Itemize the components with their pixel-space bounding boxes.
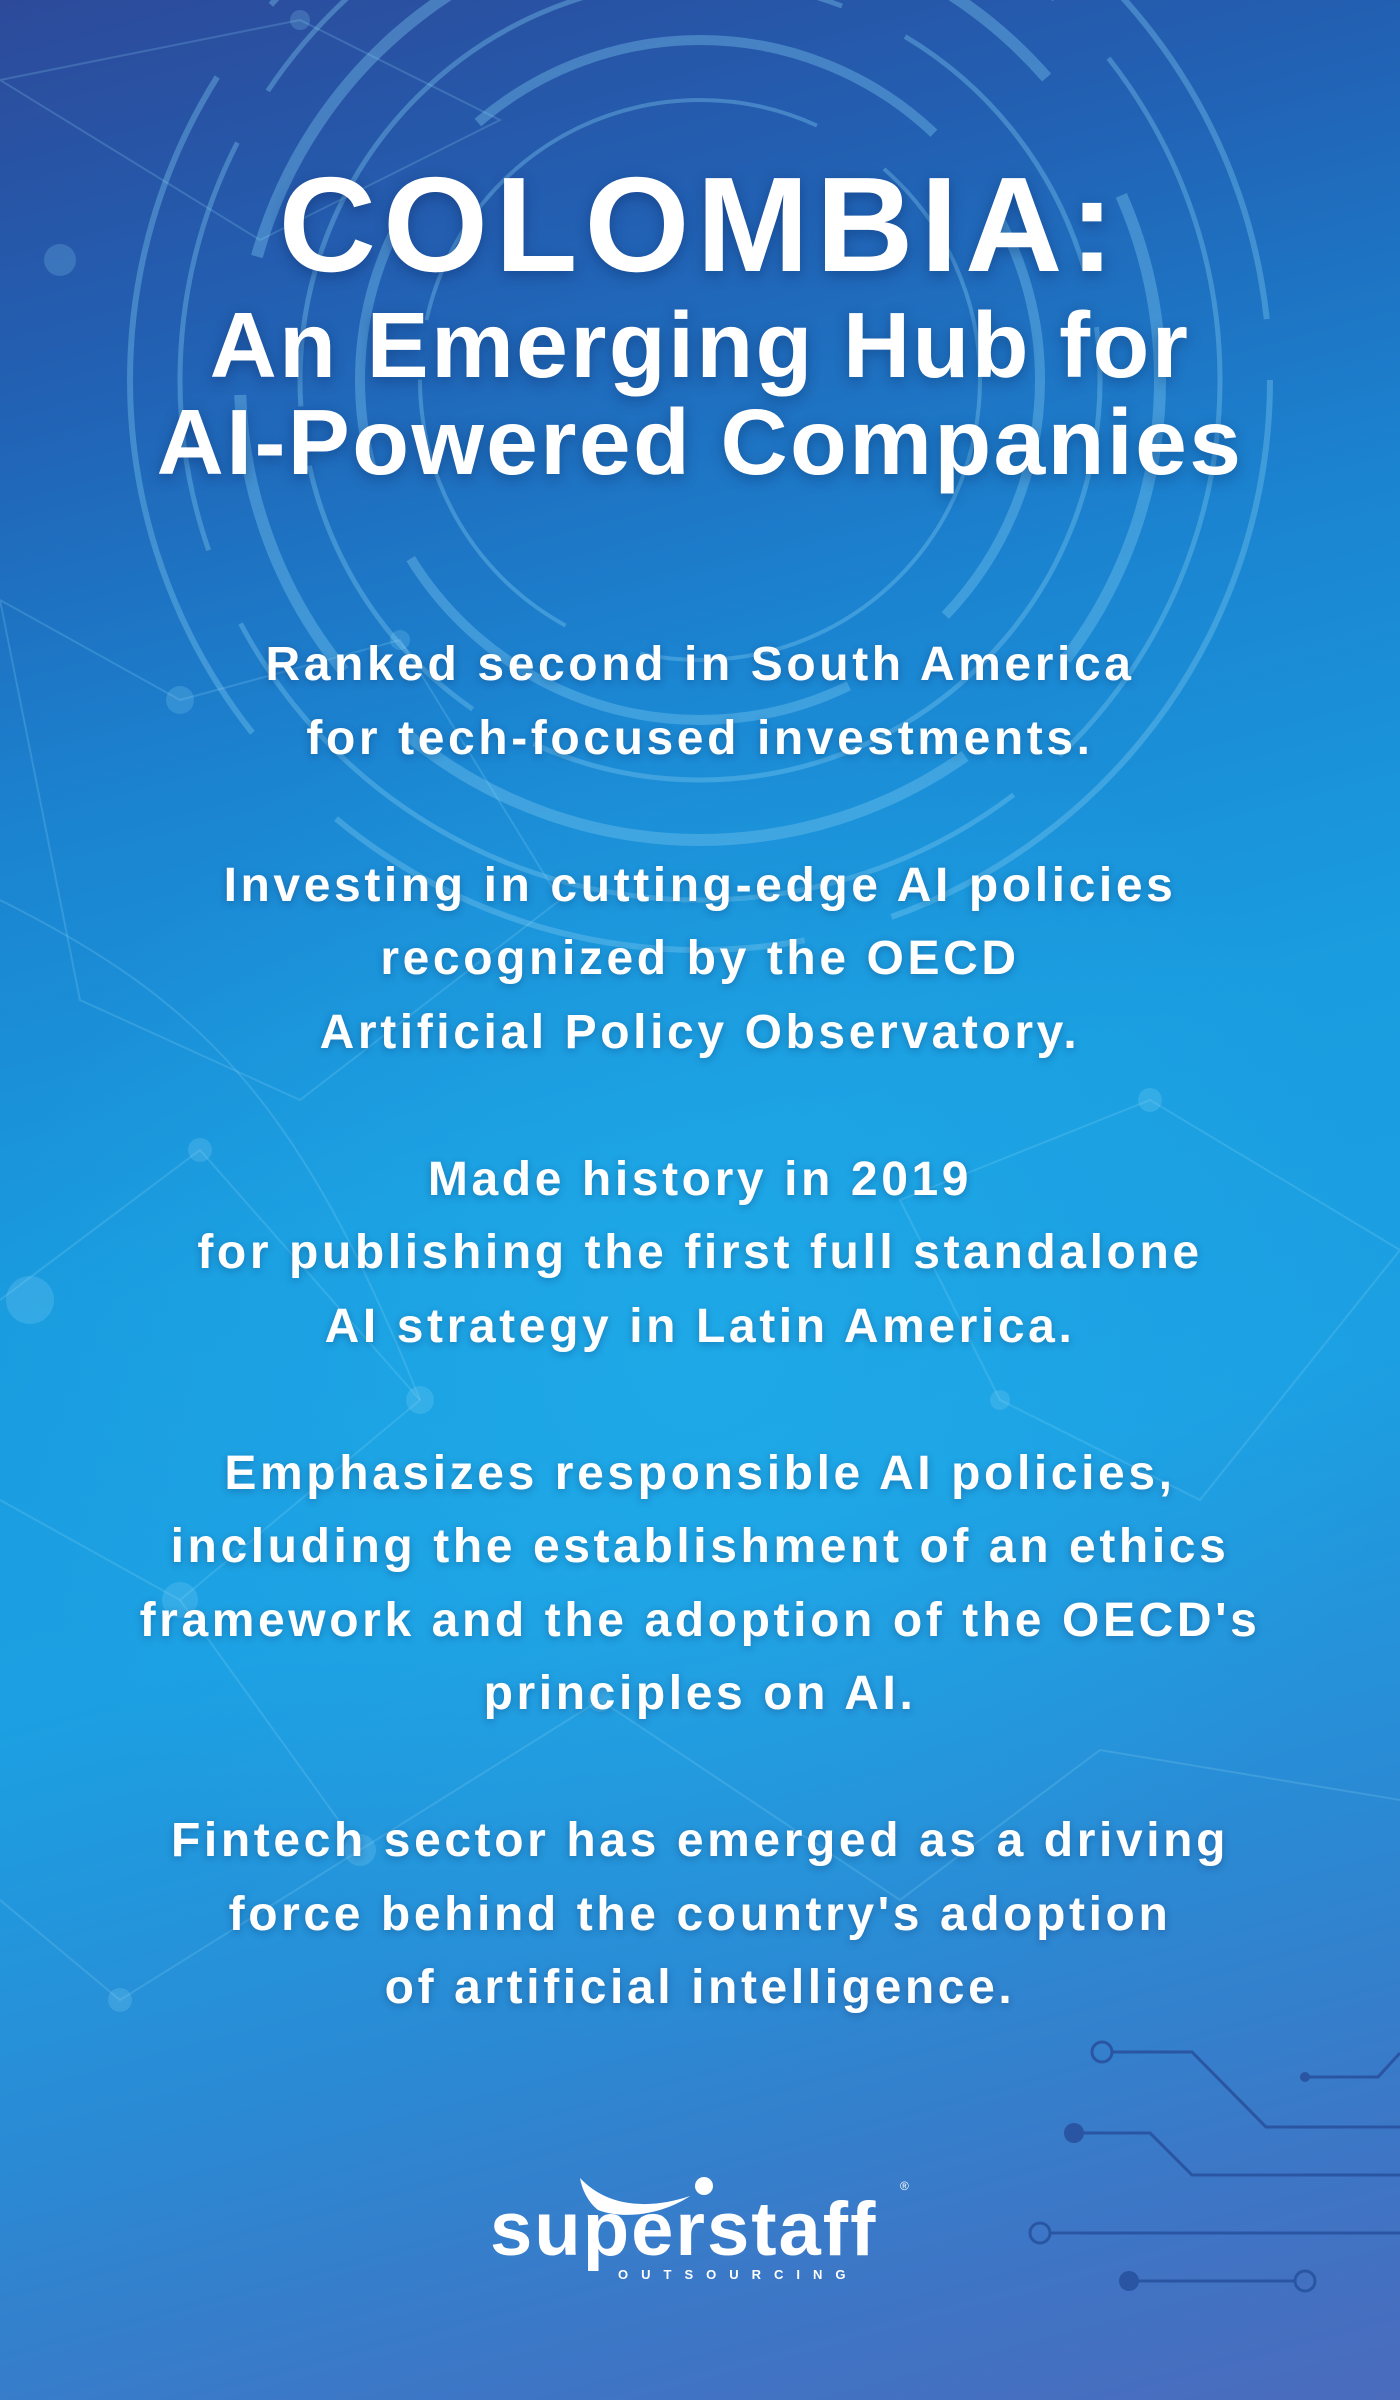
text block: facts: of artificial intelligence. xyxy=(385,1961,1015,2014)
text block: facts: Fintech sector has emerged as a driving xyxy=(171,1814,1229,1867)
text block: facts: for publishing the first full standalone xyxy=(197,1226,1203,1279)
text block: facts xyxy=(138,638,1260,2018)
text block: facts: including the establishment of an ethics xyxy=(171,1520,1229,1573)
logo: superstaff outsourcing: OUTSOURCING xyxy=(618,2267,858,2282)
text block: facts: Made history in 2019 xyxy=(428,1152,972,1206)
text block: facts: recognized by the OECD xyxy=(380,932,1020,985)
text block: facts: AI strategy in Latin America. xyxy=(325,1300,1075,1352)
logo: superstaff outsourcing: ® xyxy=(900,2179,909,2193)
text block: facts: framework and the adoption of the OECD's xyxy=(140,1594,1260,1646)
text block: facts: Artificial Policy Observatory. xyxy=(320,1006,1080,1058)
text block: facts: Emphasizes responsible AI policies, xyxy=(224,1446,1176,1500)
subtitle: An Emerging Hub for xyxy=(210,293,1190,397)
text block: facts: force behind the country's adoption xyxy=(229,1888,1171,1940)
logo: superstaff outsourcing: superstaff xyxy=(490,2187,877,2272)
text block: facts: Investing in cutting-edge AI policies xyxy=(224,858,1176,912)
subtitle xyxy=(157,293,1243,502)
title: COLOMBIA: COLOMBIA: xyxy=(279,149,1121,300)
subtitle: AI-Powered Companies xyxy=(157,390,1243,494)
text block: facts: Ranked second in South America xyxy=(265,638,1135,691)
text block: facts: for tech-focused investments. xyxy=(306,712,1094,764)
text block: facts: principles on AI. xyxy=(484,1667,916,1720)
